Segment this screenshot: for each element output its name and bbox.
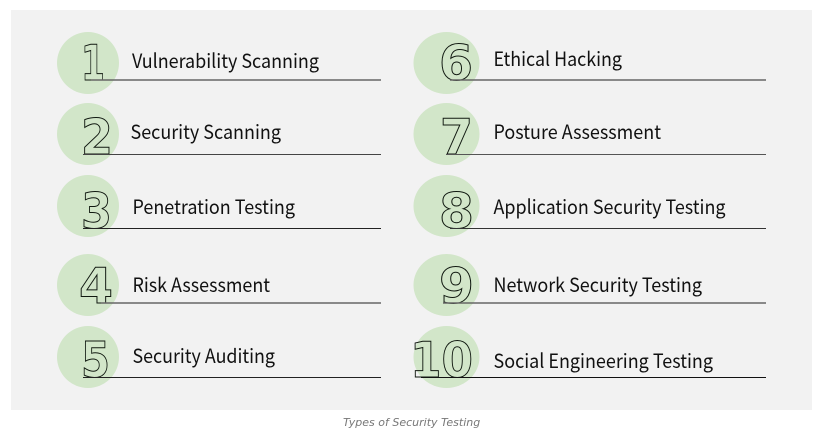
item 3: Penetration Testing: 3 — [81, 183, 112, 240]
item 4: Risk Assessment — [57, 254, 381, 316]
item 10: Social Engineering Testing: 10 — [410, 332, 473, 389]
item 1: Vulnerability Scanning — [57, 32, 381, 94]
item 6: Ethical Hacking — [414, 32, 766, 94]
item 1: Vulnerability Scanning: 1 — [81, 35, 105, 92]
item 6: Ethical Hacking: Ethical Hacking — [494, 43, 622, 72]
item 9: Network Security Testing — [414, 254, 766, 316]
item 3: Penetration Testing: Penetration Testing — [132, 191, 295, 220]
item 8: Application Security Testing: Application Security Testing — [494, 191, 726, 220]
item 3: Penetration Testing — [57, 175, 381, 240]
item 2: Security Scanning: 2 — [81, 109, 113, 166]
item 8: Application Security Testing — [414, 175, 766, 240]
item 5: Security Auditing: Security Auditing — [132, 340, 275, 369]
item 1: Vulnerability Scanning: Vulnerability Scanning — [132, 45, 319, 74]
item 5: Security Auditing — [57, 326, 381, 389]
item 2: Security Scanning: Security Scanning — [130, 116, 281, 145]
item 8: Application Security Testing: 8 — [439, 183, 474, 240]
item 5: Security Auditing: 5 — [81, 332, 110, 389]
item 10: Social Engineering Testing — [410, 326, 766, 389]
item 6: Ethical Hacking: 6 — [439, 35, 473, 92]
item 9: Network Security Testing: 9 — [439, 258, 474, 315]
item 4: Risk Assessment: Risk Assessment — [132, 269, 271, 298]
item 7: Posture Assessment: Posture Assessment — [494, 116, 662, 145]
item 2: Security Scanning — [57, 103, 381, 166]
item 9: Network Security Testing: Network Security Testing — [494, 269, 702, 298]
caption: Types of Security Testing — [343, 416, 480, 429]
item 7: Posture Assessment: 7 — [440, 109, 473, 166]
item 10: Social Engineering Testing: Social Engineering Testing — [494, 345, 713, 374]
item 4: Risk Assessment: 4 — [79, 258, 113, 315]
item 7: Posture Assessment — [414, 103, 766, 166]
